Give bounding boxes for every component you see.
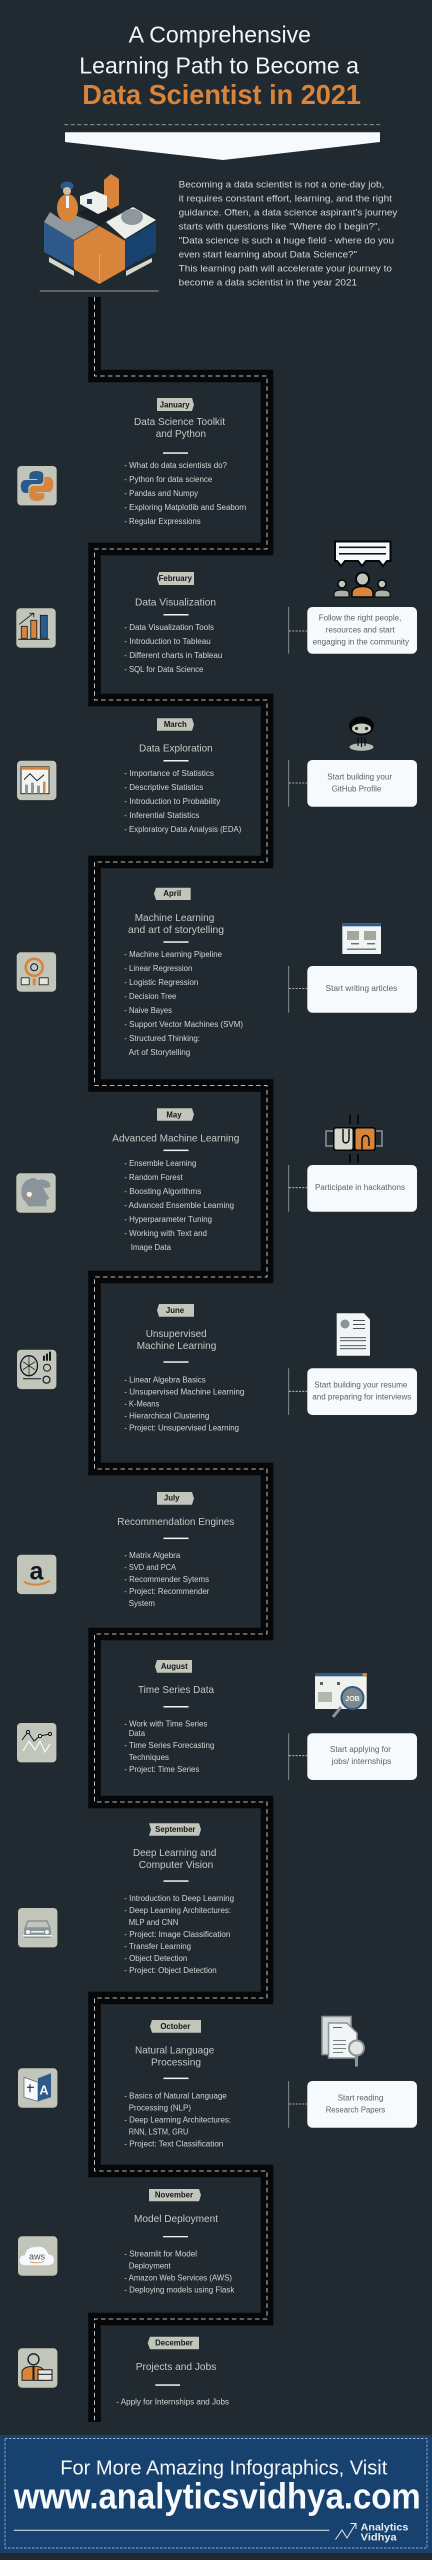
month tag: March	[164, 720, 187, 729]
topic list: Image Data	[131, 1243, 172, 1252]
callout: articles	[289, 966, 417, 1013]
heading: Data Visualization	[135, 598, 216, 608]
topic list	[124, 769, 242, 834]
topic list: - Work with Time Series	[124, 1720, 207, 1729]
topic list: - Inferential Statistics	[124, 811, 199, 820]
panel: March	[124, 718, 242, 834]
panel: August	[124, 1660, 214, 1774]
topic list: - Machine Learning Pipeline	[124, 950, 223, 959]
icon: amazon logo: a	[30, 1558, 45, 1586]
footer banner	[0, 2435, 432, 2553]
intro text block: starts with questions like "Where do I begin?",	[179, 221, 380, 231]
month tag: June	[166, 1306, 185, 1315]
icon: speech bubble and people	[334, 542, 390, 597]
topic list: - Project: Recommender	[124, 1587, 210, 1596]
heading	[128, 913, 224, 936]
heading: Computer Vision	[139, 1860, 213, 1871]
heading: Data Science Toolkit	[134, 417, 225, 428]
topic list: Art of Storytelling	[129, 1048, 190, 1057]
icon: professional with briefcase	[18, 2348, 57, 2388]
icon: aws cloud: aws	[29, 2251, 45, 2261]
topic list: - Regular Expressions	[124, 517, 201, 526]
topic list	[124, 1720, 214, 1774]
icon: dashboard window	[17, 761, 56, 800]
month tag	[154, 888, 191, 900]
topic list: - Object Detection	[124, 1954, 187, 1963]
topic list: - Linear Regression	[124, 964, 192, 973]
heading	[135, 2046, 215, 2068]
topic list: - Basics of Natural Language	[124, 2091, 227, 2100]
callout: hackathons	[289, 1165, 417, 1212]
topic list	[124, 1375, 244, 1432]
icon: amazon logo	[17, 1555, 56, 1594]
icon: brain and bulb	[17, 1350, 56, 1389]
panel: January	[124, 398, 246, 526]
callout: jobs: jobs/ internships	[331, 1757, 391, 1766]
heading: Deep Learning and	[133, 1848, 217, 1859]
panel: November	[124, 2189, 235, 2295]
icon: aws cloud	[18, 2236, 57, 2276]
month tag: October	[160, 2022, 190, 2031]
icon: brain head	[16, 1173, 56, 1213]
month tag: April	[163, 889, 181, 898]
topic list: - Ensemble Learning	[124, 1159, 196, 1168]
topic list: Deployment	[129, 2262, 171, 2271]
callout: papers: Start reading	[338, 2093, 383, 2102]
icon: research papers	[322, 2016, 364, 2066]
topic list: - Introduction to Probability	[124, 797, 220, 806]
heading: Advanced Machine Learning	[112, 1134, 240, 1144]
topic list: - Decision Tree	[124, 992, 177, 1001]
topic list: - Hyperparameter Tuning	[124, 1215, 212, 1224]
topic list: Processing (NLP)	[129, 2103, 191, 2112]
intro text block: guidance. Often, a data science aspirant's journey	[179, 207, 398, 217]
icon: time series lines	[17, 1723, 56, 1762]
topic list: - SQL for Data Science	[124, 665, 204, 674]
topic list: - Introduction to Tableau	[124, 637, 211, 646]
topic list: - Linear Algebra Basics	[124, 1375, 206, 1384]
topic list: Techniques	[129, 1753, 169, 1762]
topic list: - Apply for Internships and Jobs	[116, 2398, 229, 2407]
topic list: - Project: Object Detection	[124, 1966, 217, 1975]
callout: github: Start building your	[327, 773, 392, 782]
topic list: - Exploring Matplotlib and Seaborn	[124, 503, 246, 512]
logo: Analytics Vidhya	[336, 2522, 408, 2543]
heading: Time Series Data	[138, 1685, 214, 1696]
icon: resume	[337, 1313, 370, 1356]
heading: and art of storytelling	[128, 925, 224, 936]
heading: Machine Learning	[137, 1341, 217, 1352]
intro text block: "Data science is such a huge field - where do you	[179, 235, 394, 245]
topic list: - Pandas and Numpy	[124, 489, 198, 498]
callout: github: GitHub Profile	[332, 785, 382, 794]
callout: community: Follow the right people,	[319, 613, 401, 622]
panel: February	[124, 572, 222, 674]
topic list: - Project: Unsupervised Learning	[124, 1423, 239, 1432]
panel: June	[124, 1304, 244, 1432]
heading: Model Deployment	[134, 2214, 218, 2225]
topic list: - Deploying models using Flask	[124, 2286, 235, 2295]
month tag: August	[161, 1662, 188, 1671]
intro text block: it requires constant effort, learning, and the right	[179, 193, 392, 203]
topic list: - Project: Text Classification	[124, 2139, 223, 2148]
topic list: - Logistic Regression	[124, 978, 198, 987]
topic list: System	[129, 1599, 155, 1608]
topic list: - Transfer Learning	[124, 1942, 191, 1951]
heading: Machine Learning	[135, 913, 215, 924]
topic list	[124, 623, 222, 674]
topic list: - Working with Text and	[124, 1229, 207, 1238]
icon: translation book: A	[39, 2082, 49, 2097]
month tag: November	[155, 2190, 193, 2199]
icon: gear pipeline	[17, 952, 56, 992]
topic list: - Matrix Algebra	[124, 1551, 181, 1560]
topic list	[124, 2250, 235, 2295]
topic list: - Recommender Sytems	[124, 1575, 209, 1584]
heading: Unsupervised	[146, 1329, 207, 1340]
topic list: - Random Forest	[124, 1173, 183, 1182]
heading	[133, 1848, 217, 1871]
intro text block: even start learning about Data Science?"	[179, 249, 357, 259]
intro text block: Becoming a data scientist is not a one-day job,	[179, 179, 384, 189]
intro text block	[179, 179, 398, 287]
callout: community	[289, 607, 417, 654]
topic list	[124, 461, 246, 526]
panel: April	[124, 888, 243, 1057]
topic list: - Time Series Forecasting	[124, 1741, 214, 1750]
icon: articles browser	[342, 923, 381, 954]
callout: articles: Start writing articles	[326, 984, 397, 993]
topic list: - What do data scientists do?	[124, 461, 228, 470]
callout: papers: Research Papers	[326, 2105, 385, 2114]
callout: jobs: Start applying for	[330, 1745, 391, 1754]
topic list	[124, 950, 243, 1057]
panel: December	[116, 2337, 229, 2407]
callout: resume: Start building your resume	[314, 1381, 408, 1390]
topic list: - Amazon Web Services (AWS)	[124, 2274, 232, 2283]
heading: and Python	[156, 429, 206, 440]
panel: July	[117, 1492, 234, 1608]
callout: jobs	[289, 1733, 417, 1780]
topic list: - SVD and PCA	[124, 1563, 177, 1572]
topic list: - Streamlit for Model	[124, 2250, 197, 2259]
heading: Natural Language	[135, 2046, 215, 2056]
topic list: - Project: Image Classification	[124, 1930, 230, 1939]
heading: Recommendation Engines	[117, 1517, 234, 1528]
white arrow banner	[65, 132, 380, 160]
month tag: September	[155, 1825, 195, 1834]
title: A Comprehensive	[129, 22, 311, 48]
panel: October	[124, 2020, 231, 2148]
topic list: - Naive Bayes	[124, 1006, 172, 1015]
topic list	[124, 1894, 234, 1975]
topic list: - Unsupervised Machine Learning	[124, 1387, 244, 1396]
logo: Analytics Vidhya: Analytics	[361, 2522, 408, 2534]
callout: papers	[289, 2081, 417, 2128]
topic list: - Project: Time Series	[124, 1765, 199, 1774]
icon: github octocat	[349, 716, 374, 751]
road path	[94, 297, 267, 2422]
heading: Projects and Jobs	[136, 2362, 216, 2373]
topic list: - Introduction to Deep Learning	[124, 1894, 234, 1903]
topic list: - Support Vector Machines (SVM)	[124, 1020, 243, 1029]
intro text block: This learning path will accelerate your journey to	[179, 263, 392, 273]
topic list: - Boosting Algorithms	[124, 1187, 201, 1196]
topic list: - Advanced Ensemble Learning	[124, 1201, 234, 1210]
month tag: January	[160, 400, 190, 409]
icon: job search	[315, 1673, 367, 1717]
callout: resume	[289, 1368, 417, 1415]
topic list: - Different charts in Tableau	[124, 651, 222, 660]
topic list	[124, 1159, 234, 1252]
icon: translation book	[18, 2068, 57, 2108]
footer call to action: For More Amazing Infographics, Visit	[60, 2457, 388, 2479]
topic list: MLP and CNN	[129, 1918, 179, 1927]
topic list: - K-Means	[124, 1399, 159, 1408]
topic list: Data	[129, 1729, 146, 1738]
topic list: - Data Visualization Tools	[124, 623, 214, 632]
callout: community: engaging in the community	[313, 637, 409, 646]
panel: May	[112, 1108, 240, 1252]
month tag	[149, 1823, 201, 1836]
callout: community: resources and start	[326, 625, 395, 634]
icon: car	[18, 1908, 57, 1947]
topic list	[124, 1551, 210, 1608]
topic list: - Exploratory Data Analysis (EDA)	[124, 825, 242, 834]
callout: hackathons: Participate in hackathons	[315, 1183, 405, 1192]
month tag: July	[164, 1494, 180, 1503]
month tag: May	[166, 1111, 182, 1120]
month tag: February	[159, 574, 193, 583]
topic list: - Structured Thinking:	[124, 1034, 200, 1043]
month tag	[157, 1108, 194, 1121]
icon: bar chart	[16, 608, 56, 648]
icon: hackathon puzzle	[326, 1115, 382, 1163]
icon: python logo	[17, 466, 57, 505]
title: Data Scientist in 2021	[82, 79, 361, 110]
heading	[134, 417, 225, 440]
heading	[137, 1329, 217, 1352]
topic list: RNN, LSTM, GRU	[129, 2127, 188, 2136]
intro text block: become a data scientist in the year 2021	[179, 277, 357, 287]
icon: job search: JOB	[345, 1696, 360, 1703]
logo: Analytics Vidhya: Vidhya	[361, 2531, 397, 2543]
illustration: isometric data scientist	[44, 174, 156, 284]
panel: September	[124, 1823, 234, 1975]
callout: resume: and preparing for interviews	[312, 1393, 411, 1402]
heading: Processing	[151, 2058, 201, 2068]
topic list: - Descriptive Statistics	[124, 783, 203, 792]
title: Learning Path to Become a	[79, 53, 359, 79]
topic list: - Importance of Statistics	[124, 769, 214, 778]
callout: github	[289, 760, 417, 807]
topic list: - Deep Learning Architectures:	[124, 2115, 231, 2124]
topic list: - Python for data science	[124, 475, 213, 484]
title	[79, 22, 361, 110]
topic list	[124, 2091, 231, 2148]
topic list: - Deep Learning Architectures:	[124, 1906, 231, 1915]
month tag: December	[155, 2338, 193, 2347]
topic list: - Hierarchical Clustering	[124, 1411, 209, 1420]
heading: Data Exploration	[139, 744, 213, 754]
